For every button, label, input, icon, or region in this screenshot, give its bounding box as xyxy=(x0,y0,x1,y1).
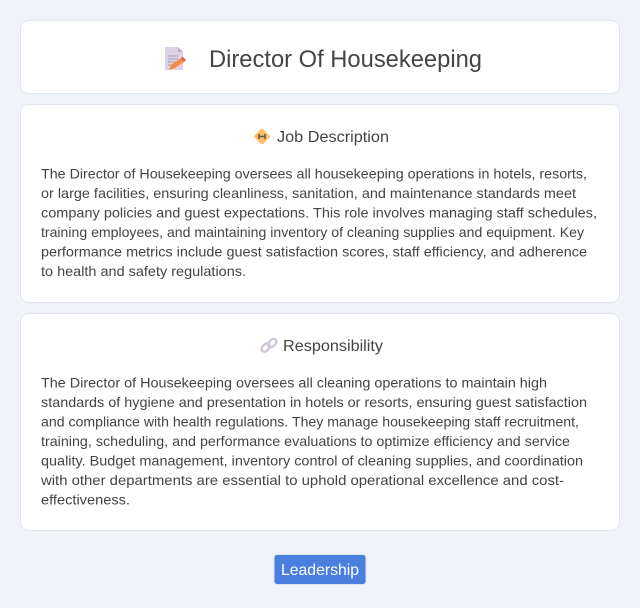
text block: responsibility: quality. Budget management, inventory control of cleaning supplies, and coordination xyxy=(41,452,583,468)
heading: job description: Job Description xyxy=(277,129,389,146)
heading: responsibility: Responsibility xyxy=(283,338,383,355)
tag: leadership: Leadership xyxy=(281,562,359,579)
tag: leadership xyxy=(274,554,366,584)
panel: job description xyxy=(20,104,620,302)
text block: job description: company policies and guest expectations. This role involves managing staff schedules, xyxy=(41,204,597,220)
text block: job description: performance metrics include guest satisfaction scores, staff efficiency, and adherence xyxy=(41,244,587,260)
icon: warning diamond xyxy=(254,128,270,145)
text block: responsibility: with other departments are essential to uphold operational excellence and cost- xyxy=(40,472,564,488)
text block: job description xyxy=(41,166,597,279)
text block: responsibility xyxy=(40,374,587,508)
text block: responsibility: and compliance with health regulations. They manage housekeeping staff recruitment, xyxy=(41,414,579,430)
panel: responsibility xyxy=(20,314,620,530)
icon: document with pencil xyxy=(165,47,186,70)
text block: responsibility: The Director of Housekeeping oversees all cleaning operations to maintain high xyxy=(41,374,547,390)
text block: job description: or large facilities, ensuring cleanliness, sanitation, and maintenance standards meet xyxy=(41,185,576,201)
text block: responsibility: effectiveness. xyxy=(41,492,130,508)
text block: job description: The Director of Housekeeping oversees all housekeeping operations in hotels, resorts, xyxy=(41,166,587,182)
text block: job description: training employees, and maintaining inventory of cleaning supplies and equipment. Key xyxy=(41,224,584,240)
text block: job description: to health and safety regulations. xyxy=(41,263,246,279)
panel: title xyxy=(20,20,620,94)
icon: link xyxy=(260,338,278,353)
heading: title: Director Of Housekeeping xyxy=(209,46,482,73)
text block: responsibility: training, scheduling, and performance evaluations to optimize efficiency and service xyxy=(41,433,570,449)
text block: responsibility: standards of hygiene and presentation in hotels or resorts, ensuring guest satisfaction xyxy=(41,394,587,410)
